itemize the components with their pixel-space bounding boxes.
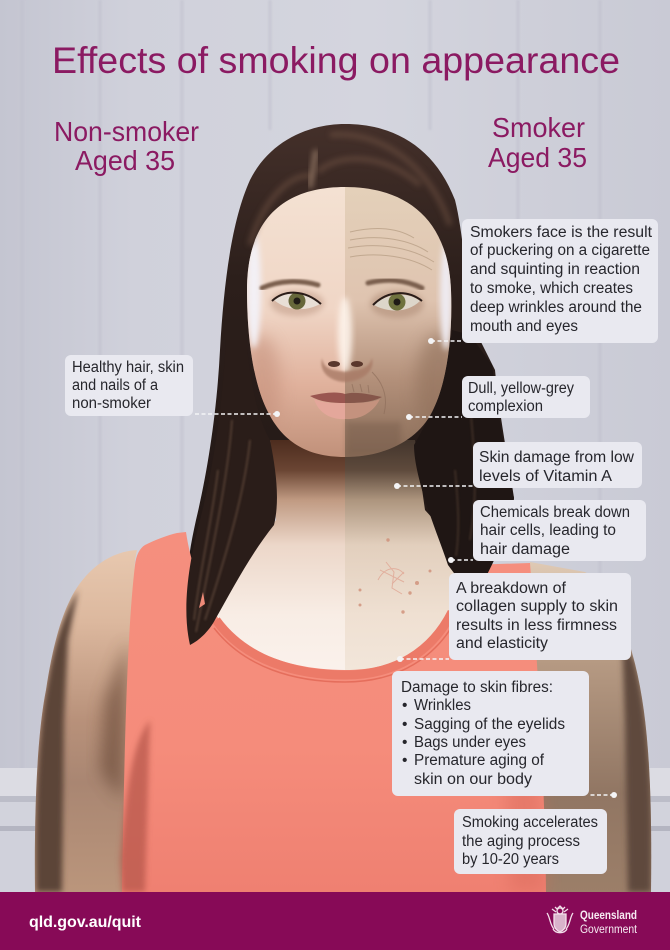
- right arm: [530, 562, 652, 892]
- callout: vitamin A: levels of Vitamin A: [479, 468, 613, 485]
- leader lines: [193, 338, 617, 798]
- icon: Queensland crest: [547, 906, 573, 933]
- callout: aging: the aging process: [462, 833, 580, 850]
- heading: smoker: [488, 112, 587, 173]
- callout: skin fibres: •: [402, 716, 407, 733]
- hair back: [187, 124, 514, 640]
- callout: smokers face: to smoke, which creates: [470, 280, 633, 297]
- callout: collagen: and elasticity: [456, 635, 548, 652]
- title: Effects of smoking on appearance: [52, 40, 620, 81]
- photo: woman half non-smoker half smoker: [30, 124, 660, 895]
- callout: skin fibres: [392, 671, 589, 796]
- chin stubble shade: [346, 422, 401, 456]
- footer url: qld.gov.au/quit: [29, 914, 142, 931]
- callout: smokers face: of puckering on a cigarette: [470, 242, 650, 259]
- temple glare: [247, 232, 261, 348]
- right top side shade: [505, 740, 546, 892]
- callout: skin fibres: •: [402, 697, 407, 714]
- heading: smoker: Smoker: [492, 112, 585, 143]
- face: [247, 187, 452, 457]
- callout: healthy: Healthy hair, skin: [72, 359, 184, 376]
- right strand highlights: [455, 400, 475, 556]
- heading: non-smoker: Aged 35: [75, 145, 175, 176]
- neck and chest right smoker: [345, 440, 470, 690]
- callout: skin fibres: Wrinkles: [414, 697, 471, 714]
- heading: non-smoker: [54, 116, 199, 176]
- callout: skin fibres: Premature aging of: [414, 752, 545, 769]
- forehead wrinkles: [348, 229, 434, 270]
- arm inner shade: [100, 640, 128, 800]
- callout: healthy: [65, 355, 193, 416]
- callout: smokers face: [462, 219, 658, 343]
- callout: collagen: results in less firmness: [456, 617, 617, 634]
- callout: smokers face: deep wrinkles around the: [470, 299, 642, 316]
- arm edge shade: [36, 590, 78, 892]
- hair strand highlights: [194, 420, 250, 632]
- callout: vitamin A: Skin damage from low: [479, 449, 635, 466]
- neck and chest left: [205, 440, 345, 690]
- top fabric shading: [120, 720, 150, 892]
- hair right strand: [414, 330, 514, 600]
- right eye: [370, 290, 424, 318]
- callout: aging: by 10-20 years: [462, 851, 559, 868]
- left arm: [30, 545, 140, 895]
- callout: skin fibres: •: [402, 734, 407, 751]
- callout: complexion: Dull, yellow-grey: [468, 380, 574, 397]
- hem stitch: [214, 620, 456, 682]
- government wordmark: Government: [580, 922, 638, 936]
- callout: skin fibres: Damage to skin fibres:: [401, 679, 553, 696]
- left cheek shadow: [250, 332, 284, 422]
- left eye: [270, 290, 324, 316]
- mouth wrinkles: [352, 372, 386, 414]
- callout: smokers face: mouth and eyes: [470, 318, 578, 335]
- callout: smokers face: and squinting in reaction: [470, 261, 640, 278]
- callout: healthy: and nails of a: [72, 377, 158, 394]
- callout: aging: [454, 809, 607, 874]
- callout: collagen: [449, 573, 631, 660]
- eyebrows: [262, 280, 422, 288]
- callout: skin fibres: Bags under eyes: [414, 734, 526, 751]
- callout: skin fibres: •: [402, 752, 407, 769]
- right cheek shadow: [413, 328, 450, 421]
- callout: hair damage: [473, 500, 646, 561]
- heading: smoker: Aged 35: [488, 142, 587, 173]
- salmon top: [122, 532, 546, 892]
- callout: complexion: complexion: [468, 398, 543, 415]
- hair parting: [310, 150, 316, 188]
- neckline hem: [216, 612, 452, 675]
- callout: smokers face: Smokers face is the result: [470, 224, 653, 241]
- callout: collagen: collagen supply to skin: [456, 598, 618, 615]
- callout: hair damage: hair damage: [480, 541, 570, 558]
- government wordmark: Queensland: [580, 908, 637, 922]
- callout: vitamin A: [473, 442, 642, 488]
- government wordmark: [580, 908, 638, 936]
- right temple glare: [440, 240, 452, 350]
- chest sun damage: [358, 538, 432, 614]
- callout: hair damage: hair cells, leading to: [480, 522, 616, 539]
- right arm edge shade: [622, 640, 651, 892]
- nose: [321, 297, 372, 382]
- lips: [310, 393, 382, 419]
- callout: healthy: non-smoker: [72, 395, 151, 412]
- callout: complexion: [462, 376, 590, 418]
- footer band: [0, 892, 670, 950]
- callout: skin fibres: Sagging of the eyelids: [414, 716, 565, 733]
- callout: aging: Smoking accelerates: [462, 814, 598, 831]
- hair front left strand: [186, 340, 277, 645]
- hair strand coral gap: [199, 592, 205, 608]
- heading: non-smoker: Non-smoker: [54, 116, 199, 147]
- callout: skin fibres: skin on our body: [414, 771, 532, 788]
- callout: collagen: A breakdown of: [456, 580, 567, 597]
- hair top sheen: [250, 135, 450, 245]
- callout: hair damage: Chemicals break down: [480, 504, 630, 521]
